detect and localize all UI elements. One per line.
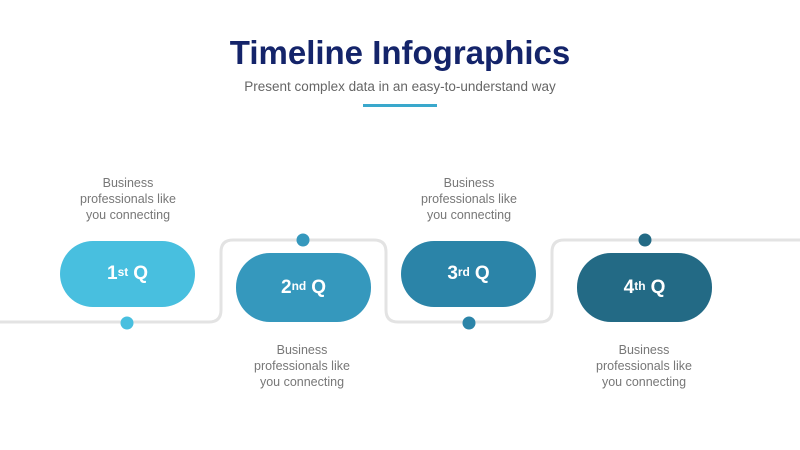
text 4 [596, 343, 692, 389]
pill: 4th Q: 4 Q [624, 276, 665, 298]
title underline [363, 104, 437, 107]
pill: 1st Q: st [118, 265, 128, 279]
text 1: professionals like [80, 192, 176, 206]
text 3: Business [444, 176, 494, 190]
pill: 2nd Q [236, 253, 371, 322]
text 2 [254, 343, 350, 389]
pill: 2nd Q: 2 Q [281, 276, 326, 298]
pill: 1st Q [60, 241, 195, 307]
text 3 [421, 176, 517, 222]
pill: 3rd Q: rd [458, 265, 470, 279]
pill: 4th Q [577, 253, 712, 322]
pill: 1st Q: 1 Q [107, 263, 148, 284]
text 4: Business [619, 343, 669, 357]
title: Timeline Infographics [230, 34, 570, 71]
text 4: you connecting [602, 375, 686, 389]
pill: 3rd Q: 3 Q [447, 263, 490, 284]
pill: 3rd Q [401, 241, 536, 307]
pill: 4th Q: th [634, 278, 646, 292]
text 1 [80, 176, 176, 222]
text 2: professionals like [254, 359, 350, 373]
text 4: professionals like [596, 359, 692, 373]
text 1: you connecting [86, 208, 170, 222]
text 3: you connecting [427, 208, 511, 222]
subtitle: Present complex data in an easy-to-understand way [244, 79, 556, 94]
text 1: Business [103, 176, 153, 190]
dots [120, 234, 652, 330]
text 2: Business [277, 343, 327, 357]
text 3: professionals like [421, 192, 517, 206]
pill: 2nd Q: nd [292, 278, 306, 292]
text 2: you connecting [260, 375, 344, 389]
